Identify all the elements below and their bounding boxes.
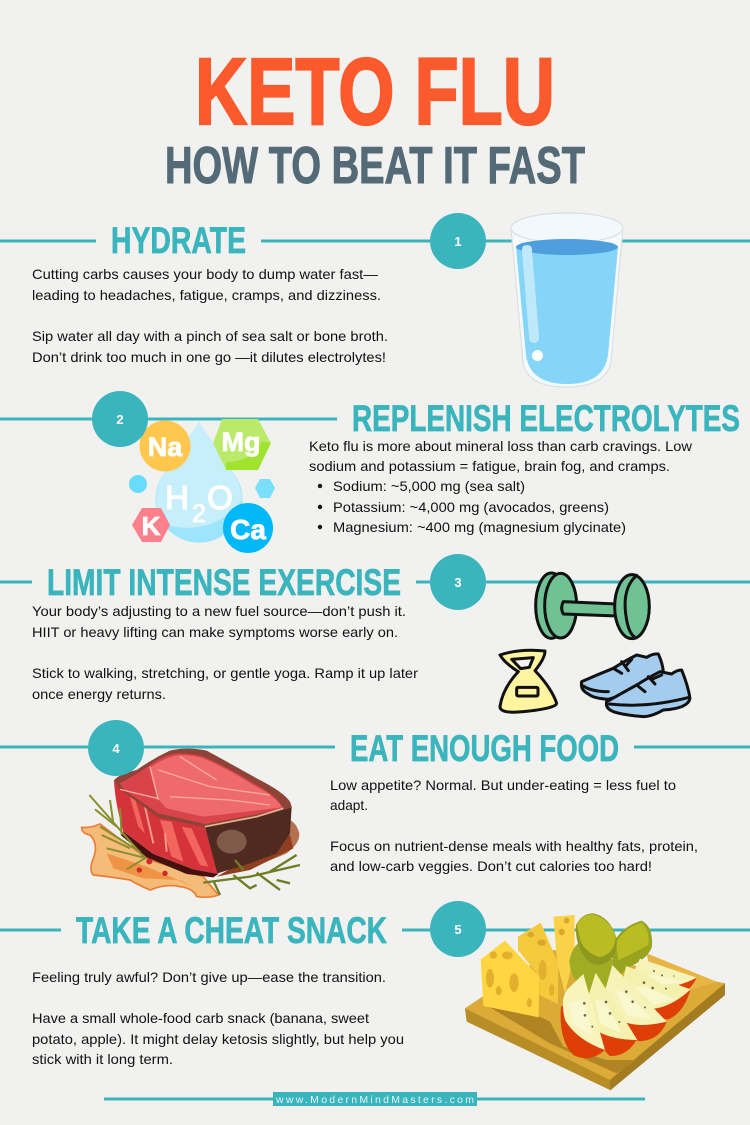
cutting board (465, 950, 725, 1091)
text: electrolytes: Potassium: ~4,000 mg (avocados, greens) (333, 499, 609, 515)
number badge 2 (92, 391, 148, 447)
icon: electrolytes and water drop (129, 419, 275, 553)
number badge 5: 5 (454, 922, 462, 937)
number badge 1 (430, 213, 486, 269)
text: hydrate: Cutting carbs causes your body to dump water fast— (32, 266, 378, 282)
text: snack: Have a small whole-food carb snack (banana, sweet (32, 1010, 369, 1026)
heading: hydrate: HYDRATE (111, 220, 246, 261)
text: electrolytes: sodium and potassium = fatigue, brain fog, and cramps. (309, 458, 670, 474)
text: hydrate (32, 266, 388, 365)
cheese wedges (481, 915, 575, 1017)
text: hydrate: leading to headaches, fatigue, cramps, and dizziness. (32, 287, 381, 303)
text: electrolytes: Sodium: ~5,000 mg (sea salt) (333, 478, 525, 494)
icon: electrolytes and water drop: O (207, 479, 233, 516)
panel: limit intense exercise (32, 554, 690, 717)
text: exercise: HIIT or heavy lifting can make symptoms worse early on. (32, 624, 398, 640)
panel: replenish electrolytes (92, 391, 740, 553)
panel: eat enough food (82, 720, 698, 897)
text: food: adapt. (330, 797, 368, 813)
icon: steak with rosemary (82, 749, 300, 897)
icon: electrolytes and water drop: 2 (192, 500, 206, 528)
heading: limit intense exercise: LIMIT INTENSE EXERCISE (47, 562, 401, 603)
number badge 4 (88, 720, 144, 776)
dumbbell (536, 573, 649, 639)
icon: electrolytes and water drop: Mg (222, 427, 260, 457)
icon: electrolytes and water drop: Na (148, 432, 183, 462)
text: snack: Feeling truly awful? Don’t give up—ease the transition. (32, 969, 386, 985)
number badge 5 (430, 901, 486, 957)
heading: eat enough food: EAT ENOUGH FOOD (350, 728, 619, 769)
number badge 1: 1 (454, 234, 462, 249)
icon: electrolytes and water drop: Ca (230, 514, 266, 545)
pickles (569, 913, 652, 993)
text: electrolytes (309, 438, 693, 535)
heading: take a cheat snack: TAKE A CHEAT SNACK (76, 910, 387, 951)
text: electrolytes: Magnesium: ~400 mg (magnesium glycinate) (333, 519, 626, 535)
title (165, 39, 585, 195)
text: food: Low appetite? Normal. But under-eating = less fuel to (330, 777, 676, 793)
panel: take a cheat snack (32, 901, 725, 1091)
text: exercise (32, 603, 418, 702)
text: food (330, 777, 698, 874)
sneakers (581, 654, 690, 717)
apple slices (561, 959, 697, 1058)
icon: electrolytes and water drop: H (165, 479, 189, 516)
text: snack: stick with it long term. (32, 1051, 173, 1067)
icon: electrolytes and water drop: K (142, 511, 161, 541)
title: KETO FLU (195, 39, 555, 145)
text: food: Focus on nutrient-dense meals with healthy fats, protein, (330, 838, 698, 854)
number badge 4: 4 (112, 741, 120, 756)
text: food: and low-carb veggies. Don’t cut calories too hard! (330, 858, 652, 874)
text: hydrate: Don’t drink too much in one go —it dilutes electrolytes! (32, 349, 386, 365)
text: hydrate: Sip water all day with a pinch of sea salt or bone broth. (32, 328, 388, 344)
footer website label: www.ModernMindMasters.com (275, 1094, 474, 1106)
text: snack (32, 969, 404, 1067)
text: exercise: Stick to walking, stretching, or gentle yoga. Ramp it up later (32, 665, 418, 681)
icon: dumbbell, kettlebell and sneakers (500, 573, 690, 717)
icon: cheese, pickle and apple board (465, 913, 725, 1091)
number badge 2: 2 (116, 412, 124, 427)
number badge 3: 3 (454, 575, 462, 590)
text: exercise: Your body’s adjusting to a new fuel source—don’t push it. (32, 603, 406, 619)
kettlebell (500, 650, 557, 712)
icon: glass of water (511, 213, 623, 387)
number badge 3 (430, 554, 486, 610)
text: exercise: once energy returns. (32, 686, 166, 702)
title: HOW TO BEAT IT FAST (165, 137, 585, 195)
panel: hydrate (32, 213, 623, 387)
text: electrolytes: Keto flu is more about mineral loss than carb cravings. Low (309, 438, 693, 454)
text: snack: potato, apple). It might delay ketosis slightly, but help you (32, 1031, 404, 1047)
